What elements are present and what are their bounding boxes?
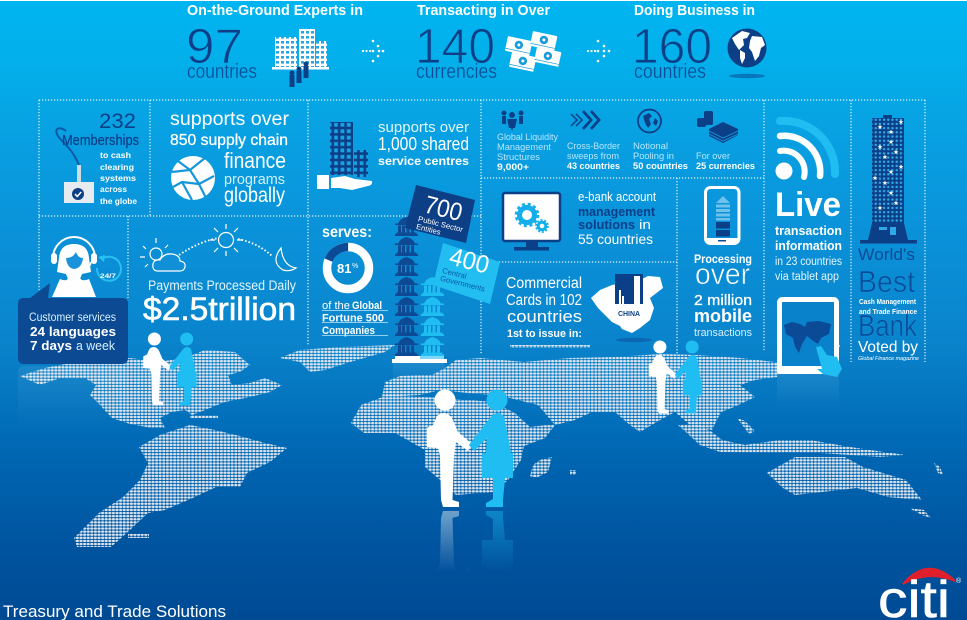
text: currencies [696, 151, 755, 172]
panel: fortune 500 [321, 224, 388, 337]
text finance: finance [224, 148, 286, 173]
woman [675, 340, 702, 413]
icon: tablet with map [777, 300, 842, 408]
text [775, 223, 842, 283]
icon: smartphone [706, 188, 739, 244]
number 97: 97 [186, 20, 243, 74]
text: World's [858, 245, 915, 264]
text: currencies: For over [696, 151, 730, 162]
text: cross-border: 43 countries [567, 161, 620, 172]
text: via tablet app [775, 271, 839, 283]
arrow: dotted [362, 40, 384, 62]
flag: 400: 400 [447, 243, 492, 279]
heading live: Live [775, 186, 841, 224]
text: Companies [322, 325, 375, 337]
label countries: countries [634, 61, 706, 83]
panel: customer services [18, 237, 128, 426]
heading: Doing Business in [634, 2, 755, 19]
bubble reflection [18, 366, 128, 426]
text: cross-border: Cross-Border [567, 141, 620, 152]
icon: lanyard badge [56, 128, 94, 203]
text: notional pooling: 50 countries [633, 161, 688, 172]
text: global liquidity [497, 132, 558, 173]
flag: 400: Central [441, 266, 468, 281]
text: global liquidity: Structures [497, 152, 540, 163]
man [427, 390, 472, 507]
flag: 700: Entities [415, 222, 442, 237]
woman [169, 332, 197, 405]
text: Best [858, 264, 915, 299]
icon: coins and notes [697, 111, 738, 143]
people: right pair [649, 340, 702, 413]
callout bubble: a week [76, 339, 116, 353]
icon: China map with card [591, 274, 663, 342]
man [649, 340, 677, 413]
text: 1,000 shared [378, 134, 469, 154]
description: to cash [100, 150, 131, 160]
text: notional pooling [633, 141, 688, 172]
heading: Transacting in Over [417, 2, 550, 19]
man [143, 332, 171, 405]
map: South America [74, 425, 287, 547]
text [578, 189, 656, 247]
text [378, 119, 469, 168]
people: centre reflection [439, 511, 513, 568]
icon: outline globe [638, 110, 661, 132]
text [694, 254, 752, 339]
text: e-bank account [578, 189, 656, 204]
text: in 23 countries [775, 256, 842, 268]
text: cross-border: sweeps from [567, 151, 619, 162]
text: transaction [775, 223, 842, 238]
heading: On-the-Ground Experts in [187, 2, 363, 19]
text: service centres [378, 154, 469, 168]
panel: supply chain [170, 109, 290, 207]
callout bubble: 7 days [30, 338, 72, 353]
map: Africa [351, 395, 556, 495]
text: currencies: 25 currencies [696, 161, 755, 172]
reflection [393, 363, 445, 393]
panel: liquidity metrics [497, 110, 755, 173]
text programs: programs [224, 171, 285, 188]
flag: 400 [433, 242, 500, 304]
text: information [775, 238, 842, 253]
map: Australia [767, 457, 922, 500]
text: Cards in 102 [506, 292, 582, 309]
description: systems [100, 173, 136, 183]
callout bubble [18, 283, 128, 364]
panel: memberships [56, 110, 139, 206]
panel: mobile transactions [694, 188, 752, 339]
icon: headset agent [51, 237, 97, 297]
label memberships: Memberships [62, 133, 139, 149]
icon: chevrons [571, 111, 599, 129]
text: mobile [694, 306, 752, 326]
base [392, 356, 447, 363]
label payments: Payments Processed Daily [148, 278, 296, 293]
header: on-the-ground experts [186, 2, 363, 87]
dark temple stack [395, 217, 418, 356]
label currencies: currencies [416, 61, 497, 83]
temples: public sector and central governments [392, 185, 500, 393]
map: Madagascar [530, 457, 552, 478]
text: 55 countries [578, 231, 653, 247]
subheading text: 850 supply chain [170, 132, 288, 149]
callout bubble: Customer services [29, 312, 116, 324]
text: global liquidity: Management [497, 142, 551, 153]
text: of the [322, 300, 350, 312]
description: the globe [100, 196, 137, 206]
map: Eurasia [382, 354, 783, 432]
icon: monitor with gears [503, 193, 560, 250]
text: cross-border [567, 141, 620, 172]
icon: tower with stars [860, 115, 917, 244]
number 232: 232 [99, 110, 136, 133]
people: centre pair [427, 390, 513, 507]
flag: 700: Public Sector [417, 214, 465, 234]
panel: shared service centres [317, 119, 469, 190]
map: islands [128, 345, 943, 538]
text: Fortune 500 [322, 312, 384, 324]
donut chart 81 percent [321, 241, 375, 295]
text: 1st to issue in: [507, 328, 582, 340]
header: currencies [415, 2, 561, 83]
description [100, 150, 137, 206]
header: doing business [632, 2, 766, 83]
text: Processing [694, 254, 752, 266]
icon: banknotes [505, 31, 561, 72]
text: Bank [858, 308, 917, 343]
map: Southeast Asia [678, 425, 905, 457]
people: left pair [143, 332, 197, 405]
panel: payments [140, 224, 296, 327]
text [322, 300, 388, 337]
text: notional pooling: Notional [633, 141, 668, 152]
text: Global [352, 300, 382, 312]
text: Commercial [506, 275, 582, 292]
panel: world's best bank [858, 115, 919, 362]
value: $2.5trillion [143, 291, 296, 327]
text: notional pooling: Pooling in [633, 151, 674, 162]
heading text: supports over [170, 109, 290, 130]
text: in [639, 217, 651, 232]
icon: people group [502, 110, 524, 131]
icon: buildings on hand [317, 122, 372, 190]
icon: globe [728, 28, 766, 78]
icon: 24/7 clock: 24/7 [100, 273, 116, 280]
text: 2 million [694, 292, 752, 309]
description: across [100, 184, 127, 194]
label serves: serves: [322, 224, 372, 241]
citi logo: ® [956, 577, 962, 585]
callout bubble: 24 languages [30, 324, 116, 339]
icon: 24/7 clock [97, 255, 121, 281]
icon: buildings and people [272, 29, 329, 87]
map: North America [20, 350, 282, 428]
text globally: globally [224, 184, 285, 207]
arrow: dotted [587, 40, 610, 62]
text: management [578, 205, 656, 219]
woman [469, 390, 513, 507]
text [858, 245, 919, 362]
text: global liquidity: 9,000+ [497, 162, 529, 173]
text: solutions [578, 218, 635, 232]
light temple stack [421, 277, 444, 356]
icon: network globe [171, 156, 215, 200]
panel grid [39, 100, 925, 362]
icon: weather arc [140, 224, 296, 271]
world map [20, 345, 943, 547]
text: global liquidity: Global Liquidity [497, 132, 558, 143]
donut chart 81 percent: % [352, 263, 358, 270]
panel: live transaction information [775, 121, 842, 408]
icon: wifi signal [776, 121, 835, 180]
text: over [695, 258, 750, 291]
icon: China map with card: CHINA [618, 311, 640, 318]
flag: 400: Governments [439, 274, 486, 294]
text: countries [507, 307, 582, 326]
map: Greenland [280, 345, 395, 372]
flag: 700 [405, 185, 475, 243]
top strip [0, 0, 967, 1]
text: Cash Management [859, 299, 917, 306]
donut chart 81 percent: 81 [337, 261, 351, 276]
text: Voted by [858, 339, 918, 356]
panel: e-bank [503, 189, 656, 250]
number 140: 140 [415, 20, 495, 74]
label countries: countries [187, 61, 257, 83]
flag: 700: 700 [422, 191, 465, 227]
panel: commercial cards [506, 274, 663, 342]
text: and Trade Finance [859, 309, 917, 316]
number 160: 160 [632, 20, 712, 74]
text [506, 275, 582, 340]
text: Global Finance magazine [858, 356, 919, 362]
text: transactions [694, 327, 752, 339]
description: clearing [100, 162, 134, 172]
text: supports over [378, 119, 469, 136]
